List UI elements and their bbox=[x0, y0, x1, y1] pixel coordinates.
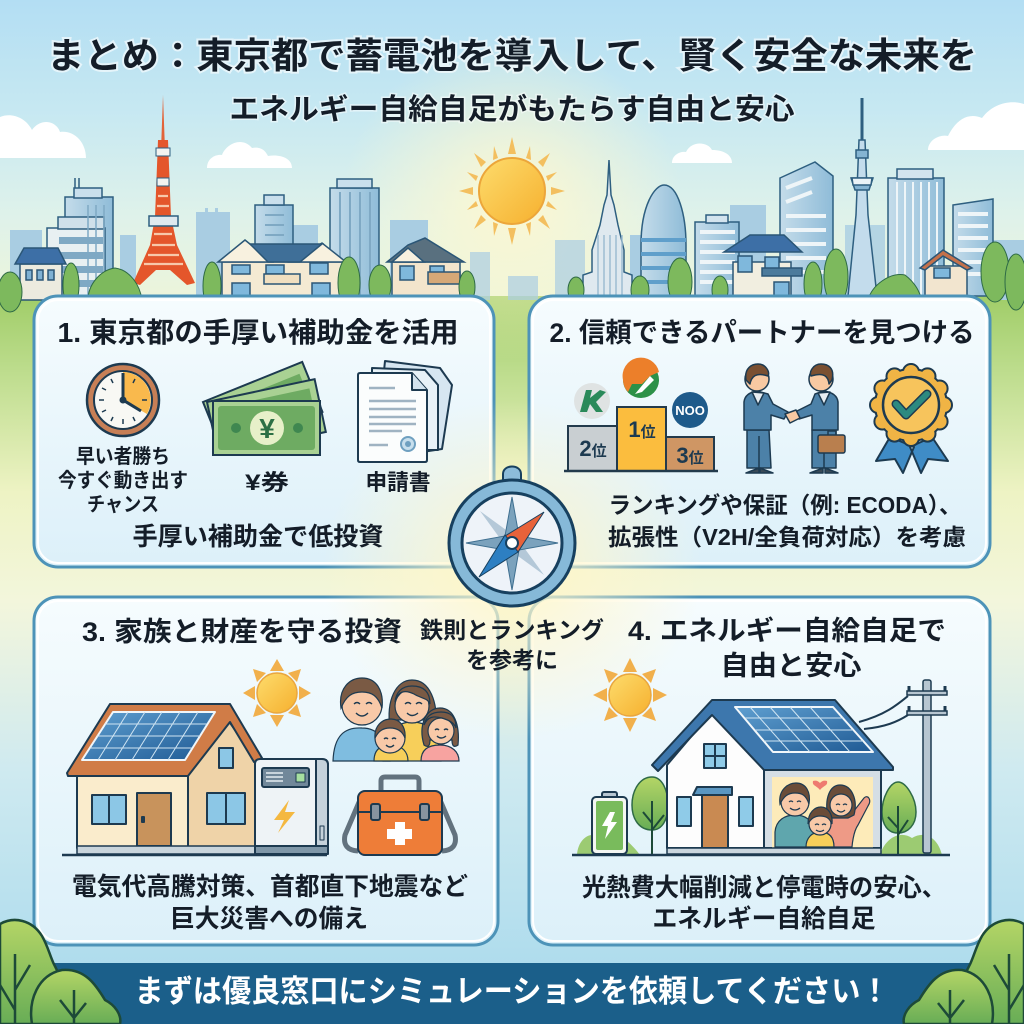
panel 2 description: ランキングや保証（例: ECODA）、 bbox=[608, 492, 962, 518]
skyline: right buildings bbox=[583, 160, 993, 298]
background sky bbox=[0, 0, 1024, 310]
clock caption bbox=[58, 445, 188, 516]
panel 3 description: 巨大災害への備え bbox=[170, 905, 368, 933]
panel 3: family and property bbox=[34, 597, 498, 945]
call to action banner bbox=[0, 963, 1024, 1024]
icon: yen banknotes: ¥ bbox=[259, 413, 275, 444]
panel 4 heading: 自由と安心 bbox=[720, 651, 862, 681]
icon: ranking podium: 2位 bbox=[579, 436, 607, 461]
skyline: distant buildings bbox=[10, 205, 1024, 300]
icon: clock bbox=[87, 364, 159, 436]
left corner trees bbox=[0, 920, 120, 1024]
illustration: house with solar roof bbox=[572, 700, 950, 855]
icon: yen banknotes bbox=[203, 362, 326, 455]
icon: application documents bbox=[358, 361, 452, 462]
icon: green battery bbox=[592, 792, 627, 854]
panel 2 description bbox=[608, 492, 966, 550]
panel 1 heading: 1. 東京都の手厚い補助金を活用 bbox=[58, 317, 458, 348]
compass caption: を参考に bbox=[466, 647, 558, 673]
panel 2: partner bbox=[529, 296, 990, 567]
compass caption: 鉄則とランキング bbox=[420, 617, 604, 643]
right corner trees bbox=[904, 920, 1024, 1024]
compass caption bbox=[420, 617, 604, 673]
document caption: 申請書 bbox=[366, 470, 430, 495]
panel 4: self-sufficiency bbox=[529, 597, 990, 945]
panel 4 heading bbox=[628, 616, 946, 681]
icon: ranking podium: NOO bbox=[675, 403, 705, 418]
Tokyo Skytree bbox=[848, 98, 877, 296]
panel 2 description: 拡張性（V2H/全負荷対応）を考慮 bbox=[608, 524, 966, 550]
clock caption: 早い者勝ち bbox=[76, 445, 170, 468]
illustration: house with solar panels bbox=[62, 704, 327, 855]
icon: ranking podium: 3位 bbox=[676, 443, 704, 468]
illustration: family in window bbox=[775, 781, 870, 847]
clouds bbox=[0, 102, 1024, 168]
panel 1: subsidies bbox=[34, 296, 494, 567]
banknote caption: ¥券 bbox=[245, 470, 289, 495]
panel 2 heading: 2. 信頼できるパートナーを見つける bbox=[550, 318, 974, 348]
icon: ranking podium bbox=[564, 358, 718, 471]
illustration: utility pole bbox=[859, 680, 947, 853]
panel 4 description bbox=[582, 874, 946, 933]
icon: panel 4 sun bbox=[593, 658, 667, 732]
title: まとめ：東京都で蓄電池を導入して、賢く安全な未来を bbox=[47, 35, 977, 76]
skyline trees and bushes bbox=[0, 242, 1024, 312]
clock caption: 今すぐ動き出す bbox=[58, 469, 188, 492]
Tokyo Tower bbox=[133, 95, 195, 285]
panel 1 summary: 手厚い補助金で低投資 bbox=[132, 523, 384, 551]
icon: ranking podium: 1位 bbox=[628, 417, 656, 442]
call to action text: まずは優良窓口にシミュレーションを依頼してください！ bbox=[134, 974, 890, 1009]
panel 4 description: エネルギー自給自足 bbox=[652, 905, 876, 933]
houses in skyline bbox=[15, 235, 972, 300]
illustration: bushes and trees bbox=[577, 777, 942, 855]
icon: panel 3 sun bbox=[243, 659, 311, 727]
icon: quality medal bbox=[870, 364, 952, 473]
illustration: emergency kit bbox=[345, 777, 455, 855]
panel 3 heading: 3. 家族と財産を守る投資 bbox=[82, 617, 402, 647]
background ground gradient bbox=[0, 296, 1024, 1024]
illustration: home battery bbox=[255, 759, 328, 854]
clock caption: チャンス bbox=[87, 494, 159, 516]
panel 4 description: 光熱費大幅削減と停電時の安心、 bbox=[582, 874, 946, 902]
big sun bbox=[459, 137, 565, 245]
panel 3 description bbox=[72, 873, 468, 933]
icon: handshake bbox=[744, 364, 845, 473]
panel 4 heading: 4. エネルギー自給自足で bbox=[628, 616, 946, 646]
skyline: left office buildings bbox=[47, 178, 379, 300]
illustration: happy family bbox=[333, 678, 459, 761]
compass bbox=[449, 466, 575, 606]
subtitle: エネルギー自給自足がもたらす自由と安心 bbox=[230, 92, 794, 126]
sun glow bbox=[342, 40, 682, 360]
panel 3 description: 電気代高騰対策、首都直下地震など bbox=[72, 873, 468, 901]
central glow bbox=[322, 400, 702, 740]
